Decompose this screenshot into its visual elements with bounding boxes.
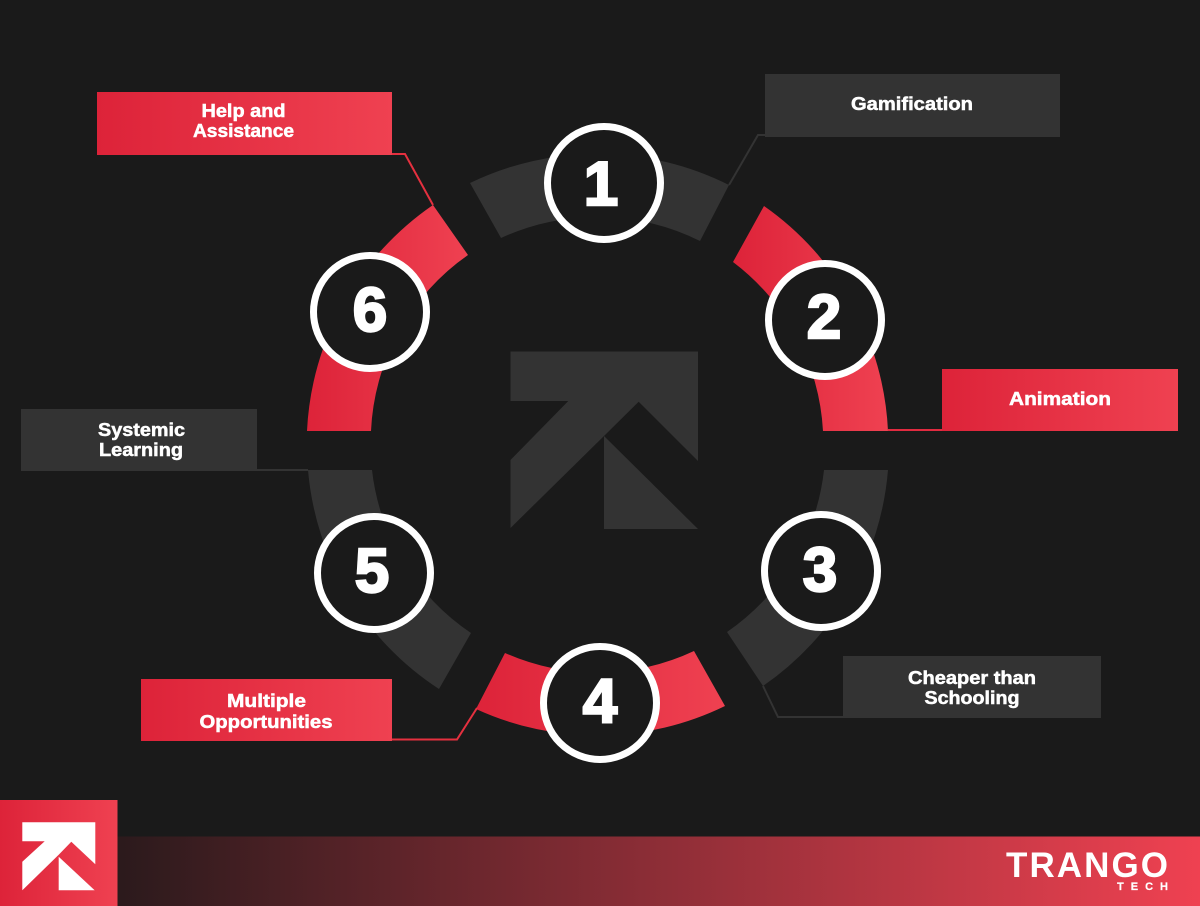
- label: help and assistance: [97, 92, 392, 155]
- label: animation: [942, 369, 1178, 431]
- connector: animation: [888, 429, 942, 431]
- label: systemic learning: Learning: [99, 440, 183, 460]
- connector: cheaper than schooling: [763, 686, 843, 717]
- ring segment 5: [308, 470, 471, 689]
- number circle 1: [548, 126, 660, 240]
- label: cheaper than schooling: [843, 656, 1101, 718]
- label: cheaper than schooling: Cheaper than: [908, 668, 1036, 688]
- label: multiple opportunities: [141, 679, 392, 741]
- brand wordmark: TRANGO: [1006, 846, 1168, 885]
- ring segment 1: [470, 154, 729, 241]
- label: help and assistance: Help and: [202, 101, 286, 121]
- brand wordmark: TECH: [1117, 881, 1168, 893]
- number circle 6: [314, 256, 426, 368]
- ring segment 2: [733, 206, 888, 431]
- number circle 5: 5: [355, 537, 389, 606]
- number circle 6: 6: [353, 276, 387, 345]
- ring segment 6: [307, 205, 468, 431]
- connector: help and assistance: [392, 154, 433, 205]
- connector: multiple opportunities: [392, 708, 477, 740]
- label: cheaper than schooling: Schooling: [924, 688, 1020, 708]
- number circle 3: [764, 514, 878, 628]
- number circle 5: [318, 516, 430, 630]
- number circle 2: 2: [807, 283, 841, 352]
- label: help and assistance: Assistance: [193, 121, 294, 141]
- number circle 4: 4: [583, 667, 618, 736]
- label: multiple opportunities: Multiple: [227, 691, 306, 711]
- label: systemic learning: [21, 409, 257, 471]
- connector: gamification: [729, 135, 765, 185]
- center logo watermark: [510, 352, 698, 529]
- label: gamification: Gamification: [851, 94, 973, 114]
- label: systemic learning: Systemic: [98, 420, 185, 440]
- footer logo tile: [0, 800, 118, 906]
- number circle 1: 1: [584, 150, 618, 219]
- ring segment 4: [476, 651, 725, 736]
- footer bar: [117, 836, 1200, 906]
- ring segment 3: [727, 470, 888, 686]
- number circle 4: [544, 646, 656, 760]
- label: gamification: [765, 74, 1060, 137]
- number circle 2: [768, 264, 882, 376]
- label: animation: Animation: [1009, 389, 1111, 409]
- label: multiple opportunities: Opportunities: [200, 712, 332, 732]
- number circle 3: 3: [803, 536, 837, 605]
- connector: systemic learning: [257, 469, 308, 471]
